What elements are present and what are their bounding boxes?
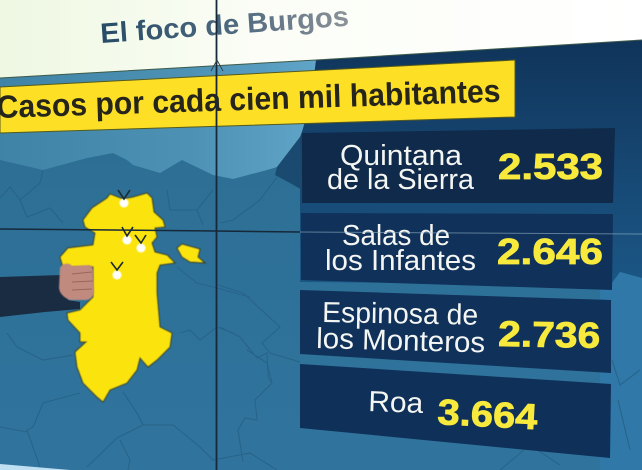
card: Salas de los Infantes	[301, 213, 613, 290]
value: 2.533	[498, 146, 603, 187]
value: 2.646	[497, 231, 603, 272]
marker: Roa	[111, 262, 123, 280]
place name: los Monteros	[316, 323, 486, 359]
top white header area	[0, 0, 642, 78]
value: 2.736	[498, 313, 601, 356]
place name	[316, 297, 486, 359]
exclave shape	[177, 244, 205, 263]
place name	[327, 140, 475, 196]
presenter arm and hand	[0, 264, 94, 317]
dark peninsula	[275, 137, 302, 190]
land at right side	[600, 272, 642, 470]
marker: Espinosa de los Monteros	[118, 190, 130, 208]
value: 3.664	[437, 391, 539, 437]
open sea, dark right side	[300, 40, 642, 285]
title: El foco de Burgos	[99, 1, 350, 49]
place name: Quintana	[340, 140, 463, 172]
main province shape	[60, 193, 175, 402]
marker: Quintana de la Sierra	[122, 227, 133, 244]
card: Espinosa de los Monteros	[300, 290, 611, 373]
yellow subtitle banner: Casos por cada cien mil habitantes	[0, 73, 501, 125]
place name: Salas de	[342, 220, 450, 252]
card: Roa	[300, 364, 611, 458]
map of Burgos province	[60, 190, 205, 402]
place name: Espinosa de	[322, 297, 478, 332]
place name: de la Sierra	[327, 164, 475, 196]
marker: Salas de los Infantes	[135, 235, 146, 252]
place name	[325, 220, 476, 277]
bottom left light streak	[0, 464, 70, 470]
province borders	[0, 170, 640, 470]
place name: los Infantes	[325, 245, 476, 277]
place name: Roa	[368, 386, 425, 420]
light sea arc	[0, 60, 316, 179]
card: Quintana de la Sierra	[302, 128, 615, 203]
